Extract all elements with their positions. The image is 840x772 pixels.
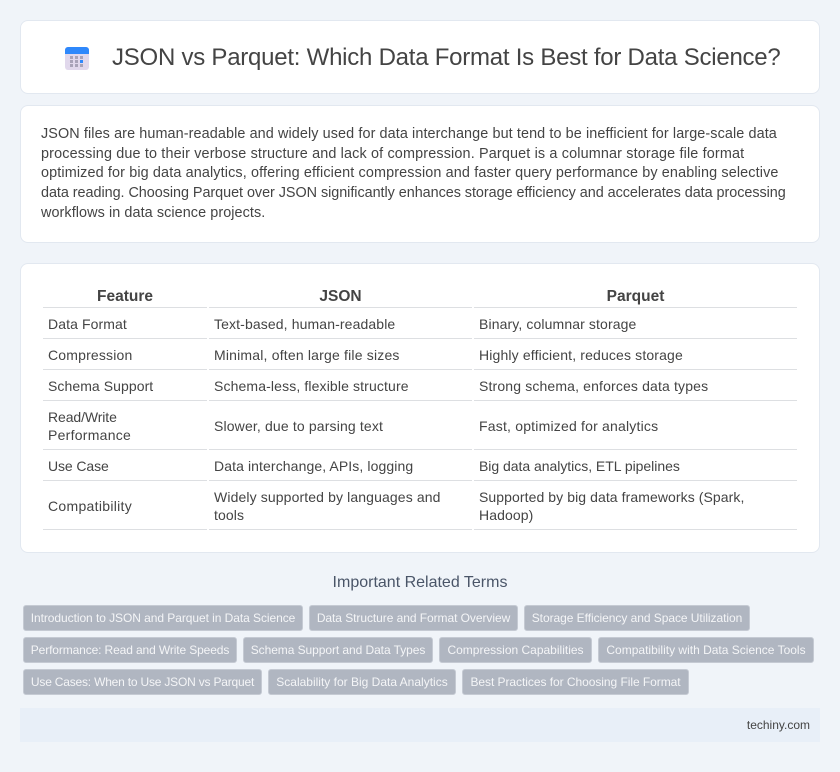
- table: Text-based, human-readable: [214, 316, 395, 332]
- table: Big data analytics, ETL pipelines: [479, 458, 680, 474]
- tag list: Scalability for Big Data Analytics: [276, 675, 448, 689]
- tag list: Compatibility with Data Science Tools: [606, 643, 806, 657]
- intro text: workflows in data science projects.: [41, 205, 265, 221]
- table: Data interchange, APIs, logging: [214, 458, 413, 474]
- table: Widely supported by languages and: [214, 489, 441, 505]
- intro text: data reading. Choosing Parquet over JSON significantly enhances storage efficiency and accelerates data processing: [41, 185, 786, 201]
- tag list: Best Practices for Choosing File Format: [470, 675, 681, 689]
- icon: calendar grid: [65, 47, 89, 70]
- tag list: Performance: Read and Write Speeds: [31, 643, 229, 657]
- table: Use Case: [48, 458, 109, 474]
- table: Parquet: [607, 288, 664, 305]
- table: Slower, due to parsing text: [214, 418, 383, 434]
- intro text: optimized for big data analytics, offering efficient compression and faster query performance by enabling selective: [41, 165, 779, 181]
- tag list: Compression Capabilities: [447, 643, 584, 657]
- table: JSON: [319, 288, 362, 305]
- table: Compression: [48, 347, 132, 363]
- header panel: [20, 20, 820, 94]
- table: Schema-less, flexible structure: [214, 378, 409, 394]
- title: JSON vs Parquet: Which Data Format Is Best for Data Science?: [112, 44, 781, 71]
- panel: introduction: [20, 105, 820, 243]
- tag list: [23, 605, 814, 695]
- table: Schema Support: [48, 378, 153, 394]
- tag list: Schema Support and Data Types: [251, 643, 425, 657]
- table: tools: [214, 507, 244, 523]
- table: Minimal, often large file sizes: [214, 347, 400, 363]
- table: Binary, columnar storage: [479, 316, 636, 332]
- intro text: [41, 126, 786, 221]
- intro text: JSON files are human-readable and widely used for data interchange but tend to be inefficient for large-scale data: [41, 126, 777, 142]
- footer credit: techiny.com: [747, 718, 810, 732]
- table: Data Format: [48, 316, 127, 332]
- tag list: Introduction to JSON and Parquet in Data Science: [31, 611, 295, 625]
- table: Compatibility: [48, 498, 132, 514]
- table: Hadoop): [479, 507, 533, 523]
- tag list: Data Structure and Format Overview: [317, 611, 510, 625]
- tag list: Storage Efficiency and Space Utilization: [532, 611, 742, 625]
- table: Highly efficient, reduces storage: [479, 347, 683, 363]
- tag list: Use Cases: When to Use JSON vs Parquet: [31, 675, 254, 689]
- table: Supported by big data frameworks (Spark,: [479, 489, 744, 505]
- table: [43, 288, 797, 530]
- table: Performance: [48, 427, 131, 443]
- intro text: processing due to their verbose structure and lack of compression. Parquet is a columnar storage file format: [41, 146, 744, 162]
- footer bar: [20, 708, 820, 742]
- table: Feature: [97, 288, 153, 305]
- table: Strong schema, enforces data types: [479, 378, 708, 394]
- panel: comparison table: [20, 263, 820, 553]
- table: Read/Write: [48, 409, 117, 425]
- heading: important related terms: Important Related Terms: [333, 574, 507, 591]
- table: Fast, optimized for analytics: [479, 418, 658, 434]
